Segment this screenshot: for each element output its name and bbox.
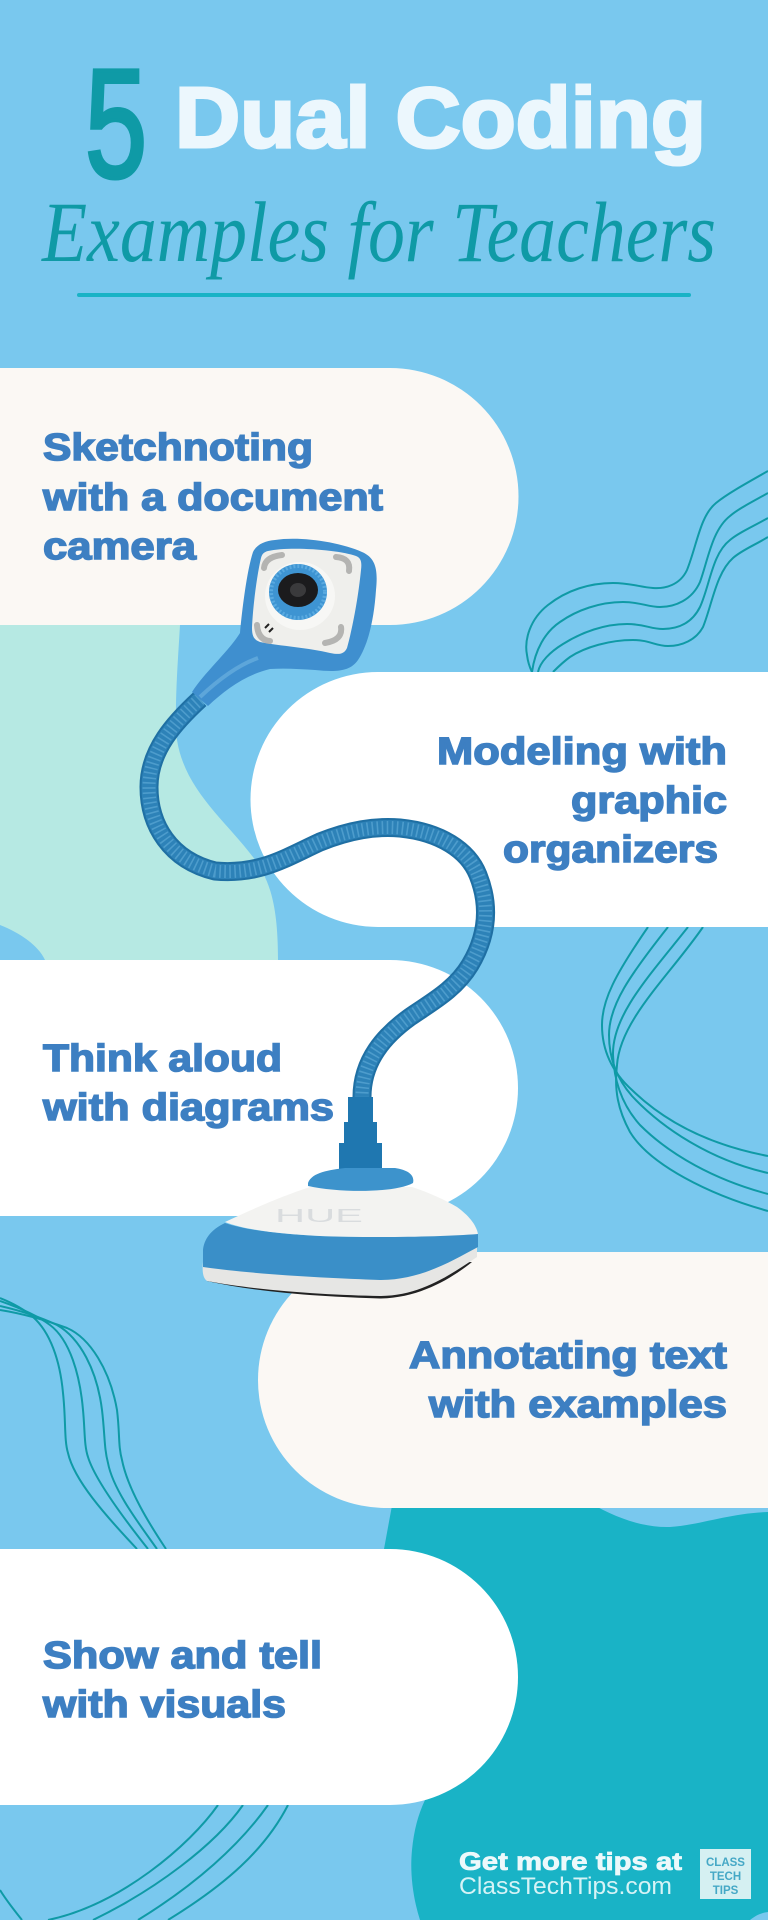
camera gooseneck: [149, 699, 486, 1097]
panel text: show and tell: with visuals: [42, 1684, 286, 1726]
wavy lines: bottom left: [0, 1805, 288, 1920]
panel: annotating: [258, 1252, 768, 1508]
panel text: sketchnoting: Sketchnoting: [43, 427, 313, 469]
title rule: [77, 293, 691, 297]
panel text: modeling: graphic: [571, 780, 727, 822]
camera lens: [265, 562, 335, 630]
wavy lines: left: [0, 1298, 166, 1549]
logo: CLASS: [706, 1857, 745, 1869]
footer call to action: [459, 1848, 683, 1900]
panel text: sketchnoting: with a document: [42, 477, 383, 519]
teal background blob: [384, 1500, 768, 1920]
panel: modeling: [251, 672, 768, 927]
logo: TECH: [710, 1871, 741, 1883]
panel text: sketchnoting: [42, 427, 383, 568]
panel text: think aloud: Think aloud: [43, 1038, 282, 1080]
camera head: [192, 539, 377, 706]
panel text: annotating: [409, 1335, 727, 1426]
panel text: show and tell: Show and tell: [43, 1635, 322, 1677]
wavy lines: upper right: [526, 471, 768, 672]
title line one: Dual Coding: [175, 71, 706, 166]
footer heading: Get more tips at: [459, 1848, 683, 1876]
logo: TIPS: [713, 1885, 739, 1897]
panel text: modeling: organizers: [503, 829, 718, 871]
title: [40, 37, 716, 280]
camera grey pads: [257, 555, 349, 643]
panel: sketchnoting: [0, 368, 518, 625]
panel: show and tell: [0, 1549, 518, 1805]
wavy lines: middle right: [602, 927, 768, 1211]
panel text: think aloud: [42, 1038, 334, 1129]
document camera: [149, 539, 486, 1298]
panel text: annotating: Annotating text: [409, 1335, 727, 1377]
panel text: modeling: [437, 731, 727, 871]
footer url: ClassTechTips.com: [459, 1873, 672, 1900]
panel text: think aloud: with diagrams: [42, 1087, 334, 1129]
panel text: annotating: with examples: [428, 1384, 727, 1426]
title number: 5: [85, 37, 147, 210]
panel: think aloud: [0, 960, 518, 1216]
panel text: modeling: Modeling with: [437, 731, 727, 773]
mint background blob: [0, 625, 278, 960]
panel text: show and tell: [42, 1635, 322, 1726]
logo: [700, 1849, 751, 1899]
camera base connector: [339, 1097, 382, 1170]
panel text: sketchnoting: camera: [43, 526, 197, 568]
camera base: [203, 1168, 478, 1298]
camera brand label: HUE: [275, 1206, 363, 1226]
